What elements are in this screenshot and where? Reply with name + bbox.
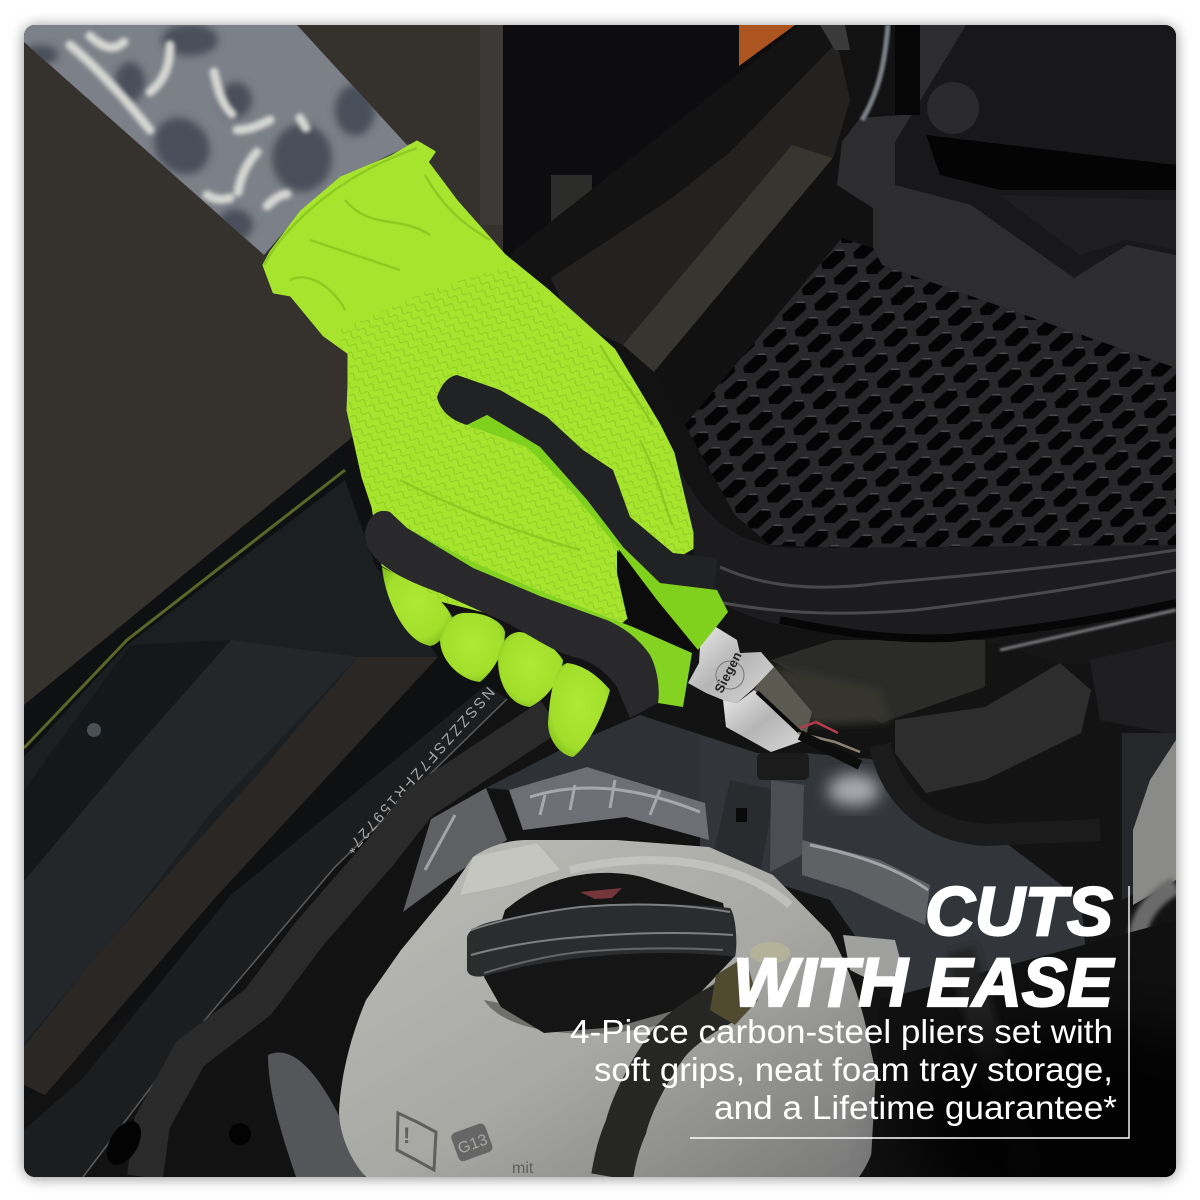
hexagonal grille [685,238,1176,556]
tattoo light marbling [70,36,306,206]
gap between plier handles [617,550,628,618]
tattooed forearm [22,24,424,265]
wrapped black hose [145,716,551,1177]
tattoo dark shading [22,24,375,241]
tape wrapped wire [872,759,1008,846]
silver wrapped tape harness [403,767,930,925]
caption frame lines [690,886,1129,1138]
manifold body [700,735,1090,1000]
fender lower panels [24,440,438,1095]
caption body text: soft grips, neat foam tray storage, [594,1051,1113,1088]
embossed vehicle number strip [24,683,507,1177]
caption body text: and a Lifetime guarantee* [714,1089,1117,1126]
reservoir hose and clamp [591,935,900,1177]
black cylinder at right [870,920,1176,1177]
pliers upper handle [437,375,728,650]
reservoir black cap [467,873,740,1034]
reservoir embossed marks [397,1113,534,1177]
brand mark on pliers: Siegen [711,649,745,695]
cut wire [798,722,860,765]
engine bay background [772,640,1176,1177]
rubber grille frame [680,470,1176,650]
glove finger four [548,663,610,757]
reservoir embossed marks: ! [403,1123,410,1148]
green nitrile glove [264,142,692,757]
reservoir embossed marks: G13 [456,1131,490,1158]
fender highlight strip [24,470,345,748]
caption body text: 4-Piece carbon-steel pliers set with [570,1013,1113,1050]
workshop wall background [24,25,823,705]
electrical connector [712,753,809,875]
lower left silver loom [268,1053,365,1177]
fender black band upper [551,25,850,372]
caption heading: CUTS [925,873,1113,950]
glove finger one [382,567,452,646]
glove finger two [440,613,505,682]
caption body text [570,1013,1117,1126]
reservoir embossed marks: mit [512,1160,534,1177]
curved metal bracket [486,715,757,803]
lower left holes [107,1121,251,1165]
glove finger three [498,632,563,707]
black plastic engine cover [837,25,1176,368]
embossed vehicle number strip: NSSZZZSF7ZFR159727* [342,683,498,857]
coolant reservoir tank [339,840,880,1177]
caption heading [733,873,1115,1021]
caption heading: WITH EASE [733,944,1115,1021]
pliers steel head [688,627,812,752]
pliers lower handle [365,511,692,718]
black tape lump [895,663,1091,793]
right side light housing [1126,740,1176,934]
vignette behind caption [910,1020,1200,1200]
